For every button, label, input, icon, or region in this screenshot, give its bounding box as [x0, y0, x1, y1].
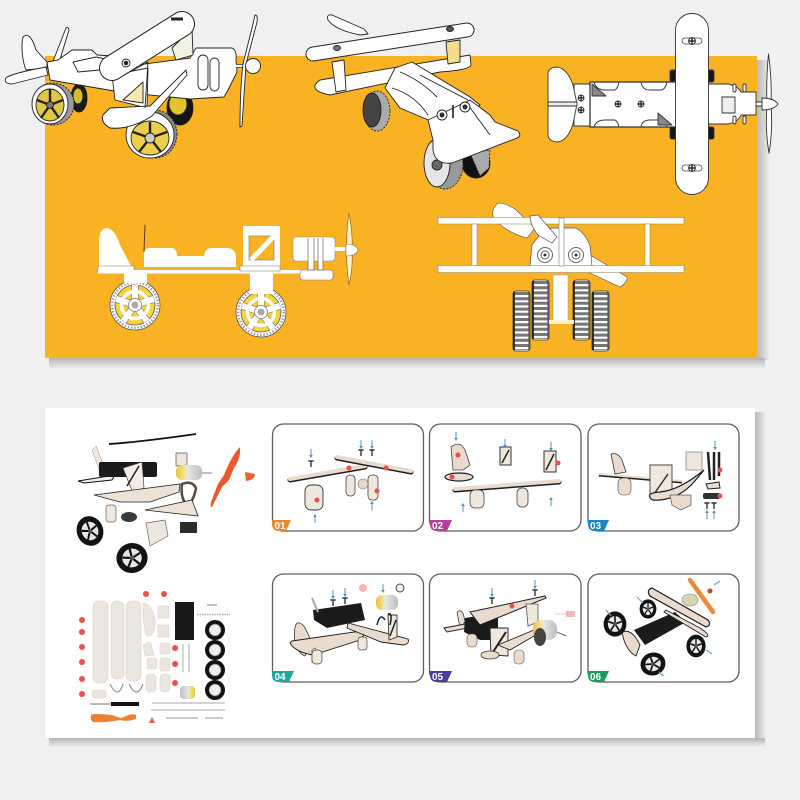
step label 05: 05 [432, 672, 444, 683]
wheel: front [424, 139, 463, 189]
step label 02: 02 [432, 521, 444, 532]
markers and arrows [489, 580, 575, 617]
step label 01: 01 [274, 521, 286, 532]
wheel: front main [126, 110, 177, 158]
propeller [211, 447, 255, 507]
markers and arrows [450, 432, 560, 512]
part number markers [79, 591, 178, 697]
panel: orange backdrop with shadow [45, 56, 770, 369]
markers and arrows [308, 440, 388, 523]
wooden parts [92, 601, 170, 698]
wood parts [445, 444, 559, 508]
step label 06 [588, 671, 609, 683]
arrows [606, 581, 720, 676]
step label 03: 03 [590, 521, 602, 532]
wheels [205, 620, 225, 700]
step card 03 [588, 424, 739, 532]
step label 04 [272, 671, 294, 683]
wheel: left [363, 91, 390, 131]
wheels: tread [513, 280, 609, 351]
wood parts and battery [444, 596, 566, 664]
propeller [756, 54, 778, 153]
wheel: front [236, 287, 286, 337]
markers and arrows [330, 584, 385, 606]
illustration: biplane rear view [313, 15, 520, 189]
panel: assembly instructions with shadow [45, 408, 766, 747]
orange propeller [91, 714, 136, 722]
wheels [604, 599, 706, 679]
step label 05 [430, 671, 452, 683]
step label 01 [272, 520, 291, 532]
propeller [240, 15, 260, 127]
battery holder [175, 602, 194, 672]
illustration: biplane three-quarter view [5, 15, 260, 158]
wheel: rear [110, 280, 160, 330]
step card 01 [272, 424, 424, 532]
propeller [346, 213, 358, 285]
illustration: biplane top view [548, 14, 778, 194]
photo: exploded view of kit [72, 434, 255, 577]
motor [180, 686, 195, 699]
illustration: biplane side view [98, 213, 358, 337]
step card 04 [272, 574, 424, 683]
photo: kit parts layout [79, 591, 230, 723]
step label 03 [588, 520, 609, 532]
markers and arrows [704, 441, 722, 519]
wheels [72, 512, 151, 577]
step card 06 [588, 574, 739, 683]
assembled plane [622, 580, 713, 656]
wood parts and battery [290, 584, 408, 664]
illustration: biplane front view [438, 203, 684, 351]
wood parts [290, 457, 411, 510]
screws and rods [151, 605, 230, 718]
wheel: far right [462, 148, 490, 178]
wheel: rear left [32, 83, 74, 125]
screwdriver [90, 702, 139, 706]
step card 05 [430, 574, 581, 683]
step label 04: 04 [274, 672, 286, 683]
wood parts [599, 452, 720, 510]
step label 02 [430, 520, 452, 532]
step label 06: 06 [590, 672, 602, 683]
step card 02 [430, 424, 581, 532]
